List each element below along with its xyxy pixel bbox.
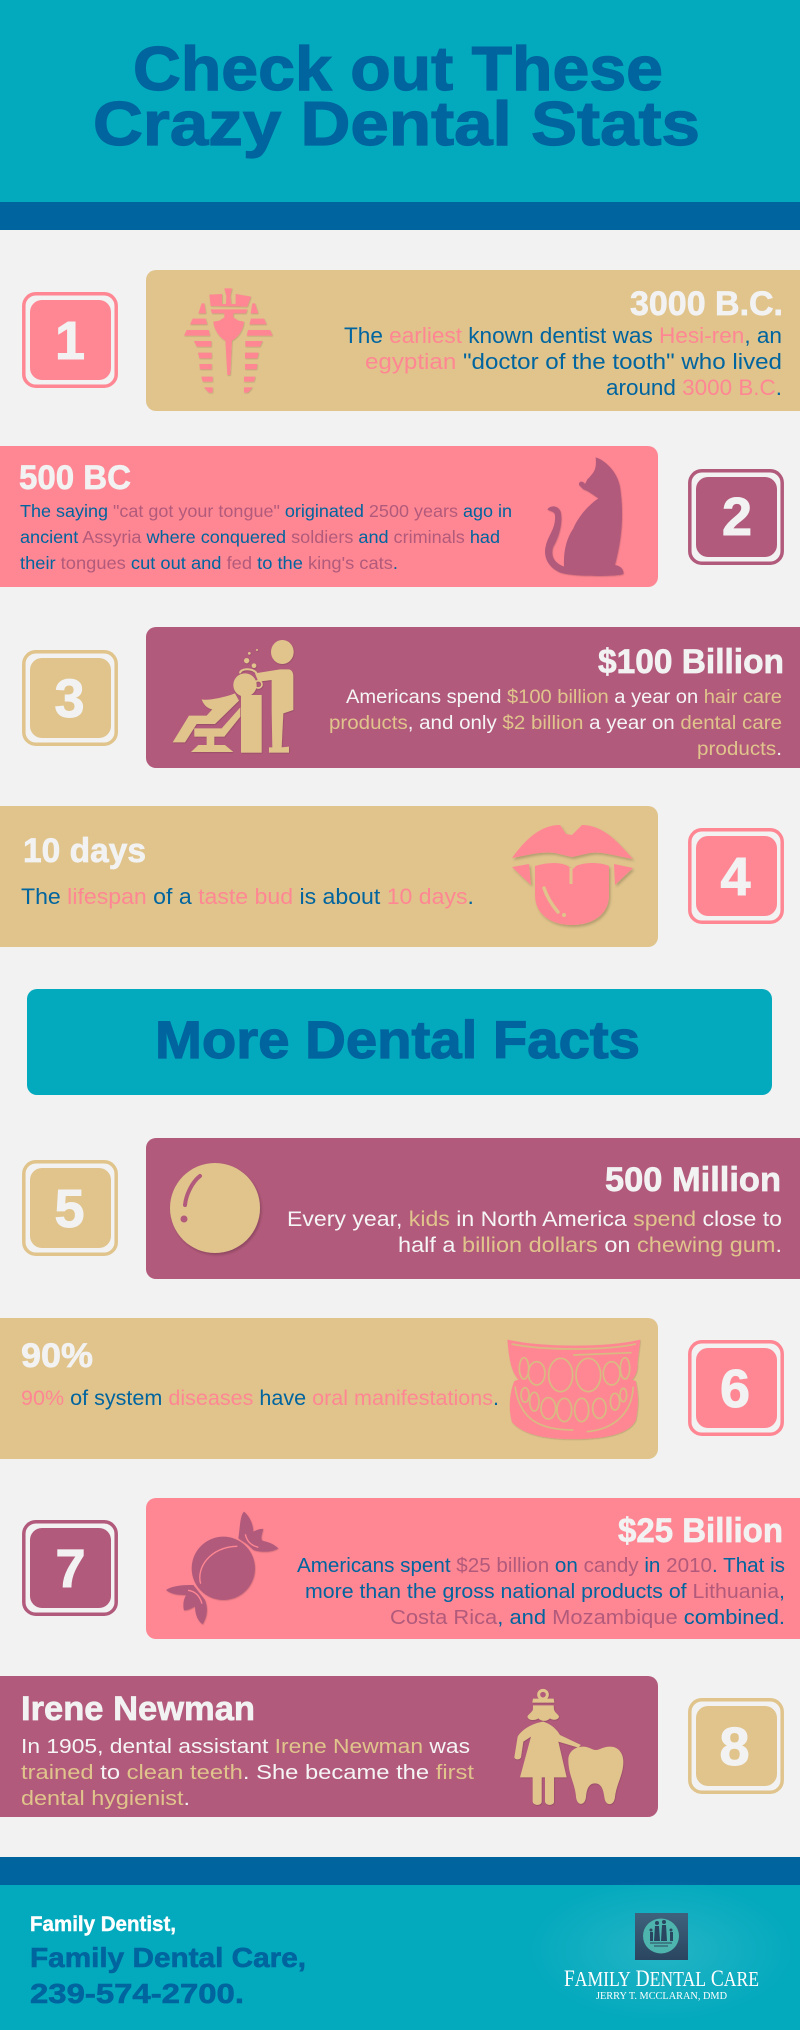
card 1 bbox=[146, 270, 800, 411]
text block: fact 7 bbox=[297, 1554, 785, 1629]
icon: candy bbox=[166, 1512, 278, 1624]
logo: Family Dental Care: JERRY T. MCCLARAN, DMD bbox=[596, 1991, 727, 2002]
panel: fact 2 bbox=[0, 446, 782, 587]
card 5 bbox=[146, 1138, 800, 1279]
heading: Irene Newman: Irene Newman bbox=[21, 1690, 255, 1728]
text block: fact 4: The lifespan of a taste bud is about 10 days. bbox=[21, 884, 474, 909]
text block: fact 6: 90% of system diseases have oral manifestations. bbox=[21, 1387, 499, 1410]
footer contact text: Family Dentist, bbox=[30, 1913, 176, 1936]
text block: fact 3: Americans spend $100 billion a year on hair care bbox=[346, 687, 782, 708]
card 2 bbox=[0, 446, 658, 587]
text block: fact 2: their tongues cut out and fed to the king's cats. bbox=[20, 553, 398, 573]
text block: fact 5: half a billion dollars on chewing gum . bbox=[398, 1233, 782, 1257]
icon: hygienist with tooth bbox=[514, 1690, 623, 1805]
badge 2 bbox=[690, 471, 782, 563]
section banner: More Dental Facts bbox=[27, 989, 772, 1095]
text block: fact 8: dental hygienist . bbox=[21, 1787, 190, 1810]
badge 2: 2 bbox=[722, 487, 752, 547]
heading: $100 Billion: $100 Billion bbox=[598, 643, 784, 681]
badge 4 bbox=[690, 830, 782, 922]
text block: fact 7: Costa Rica , and Mozambique combined. bbox=[390, 1606, 785, 1629]
text block: fact 1: The earliest known dentist was Hesi-ren, an bbox=[344, 323, 782, 348]
text block: fact 2: The saying "cat got your tongue" originated 2500 years ago in bbox=[20, 501, 512, 521]
text block: fact 1: around 3000 B.C. bbox=[606, 375, 782, 400]
icon: teeth bbox=[508, 1341, 639, 1438]
icon: gum ball bbox=[170, 1163, 260, 1253]
text block: fact 5: Every year, kids in North America spend close to bbox=[287, 1207, 782, 1231]
text block: fact 7: Americans spent $25 billion on candy in 2010. That is bbox=[297, 1554, 785, 1577]
title: Check out These bbox=[133, 35, 663, 104]
section banner: More Dental Facts: More Dental Facts bbox=[155, 1011, 640, 1070]
card 6 bbox=[0, 1318, 658, 1459]
panel: fact 4 bbox=[0, 806, 782, 947]
card 7 bbox=[146, 1498, 800, 1639]
text block: fact 8: In 1905, dental assistant Irene Newman was bbox=[21, 1735, 470, 1758]
heading: $25 Billion: $25 Billion bbox=[618, 1512, 783, 1550]
logo: Family Dental Care bbox=[526, 1878, 796, 2022]
panel: fact 5 bbox=[24, 1138, 800, 1279]
text block: fact 7: more than the gross national products of Lithuania, bbox=[305, 1580, 785, 1603]
text block: fact 5 bbox=[287, 1207, 782, 1257]
text block: fact 2 bbox=[20, 501, 512, 573]
badge 5: 5 bbox=[54, 1179, 85, 1239]
panel: fact 1 bbox=[24, 270, 800, 411]
card 4 bbox=[0, 806, 658, 947]
badge 8: 8 bbox=[719, 1717, 750, 1777]
panel: fact 6 bbox=[0, 1318, 782, 1459]
icon: hair wash in salon chair bbox=[173, 640, 294, 753]
icon: tongue and lips bbox=[512, 825, 633, 925]
icon: pharaoh bbox=[184, 288, 273, 393]
text block: fact 3: products , and only $2 billion a year on dental care bbox=[329, 713, 782, 734]
text block: fact 3 bbox=[329, 687, 782, 760]
badge 3 bbox=[24, 652, 116, 744]
badge 1: 1 bbox=[55, 311, 85, 371]
badge 6 bbox=[690, 1342, 782, 1434]
badge 7: 7 bbox=[55, 1539, 86, 1599]
badge 1 bbox=[24, 294, 116, 386]
badge 7 bbox=[24, 1522, 116, 1614]
heading: 10 days: 10 days bbox=[23, 832, 146, 870]
logo: Family Dental Care: FAMILY DENTAL CARE bbox=[564, 1966, 759, 1991]
text block: fact 3: products . bbox=[697, 739, 782, 760]
badge 4: 4 bbox=[720, 847, 751, 907]
text block: fact 2: ancient Assyria where conquered soldiers and criminals had bbox=[20, 527, 500, 547]
badge 6: 6 bbox=[720, 1359, 750, 1419]
footer contact text: Family Dental Care, bbox=[30, 1942, 306, 1973]
card 8 bbox=[0, 1676, 658, 1817]
heading: 3000 B.C.: 3000 B.C. bbox=[630, 285, 783, 323]
footer bbox=[0, 1857, 800, 2030]
panel: fact 3 bbox=[24, 627, 800, 768]
badge 8 bbox=[690, 1700, 782, 1792]
heading: 500 BC: 500 BC bbox=[19, 459, 131, 497]
text block: fact 8: trained to clean teeth . She became the first bbox=[21, 1761, 474, 1784]
badge 3: 3 bbox=[54, 669, 85, 729]
card 3 bbox=[146, 627, 800, 768]
footer contact text: 239-574-2700. bbox=[30, 1978, 244, 2009]
header banner bbox=[0, 0, 800, 230]
icon: cat bbox=[545, 457, 623, 576]
heading: 90%: 90% bbox=[21, 1337, 93, 1375]
title: Crazy Dental Stats bbox=[93, 90, 700, 159]
panel: fact 8 bbox=[0, 1676, 782, 1817]
footer contact text bbox=[30, 1913, 306, 2009]
title bbox=[93, 35, 700, 159]
text block: fact 8 bbox=[21, 1735, 474, 1810]
badge 5 bbox=[24, 1162, 116, 1254]
panel: fact 7 bbox=[24, 1498, 800, 1639]
text block: fact 1: egyptian "doctor of the tooth" who lived bbox=[365, 349, 782, 374]
heading: 500 Million: 500 Million bbox=[605, 1161, 781, 1199]
text block: fact 1 bbox=[344, 323, 782, 400]
